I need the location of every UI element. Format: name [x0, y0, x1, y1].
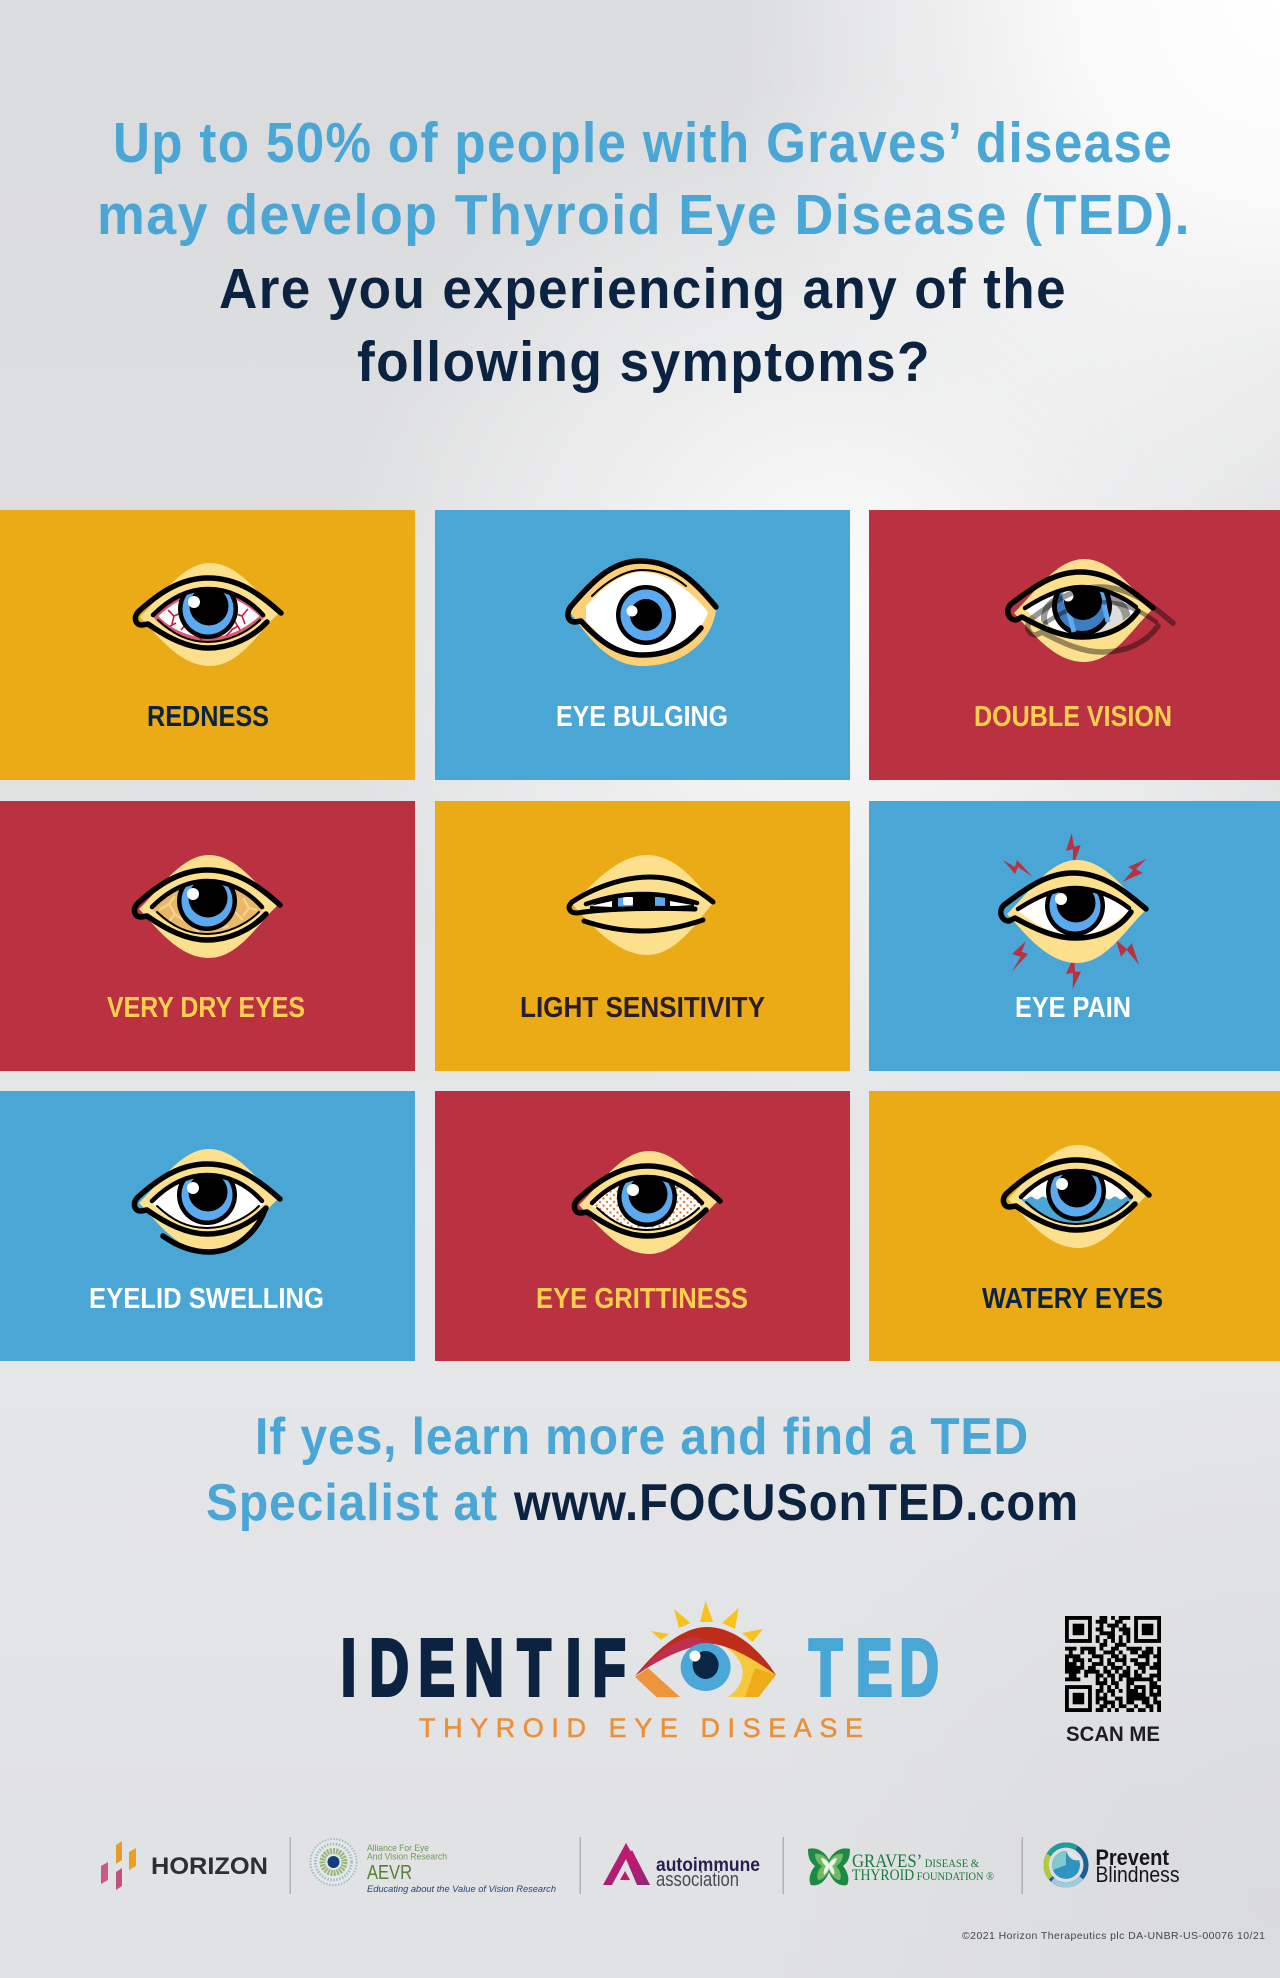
label: eyelid swelling: EYELID SWELLING — [89, 1283, 324, 1315]
logo: Prevent Blindness: Prevent — [1096, 1845, 1170, 1870]
panel: redness — [0, 510, 415, 780]
label: very dry eyes: VERY DRY EYES — [107, 992, 305, 1024]
icon: painful eye with lightning bolts — [1001, 833, 1147, 989]
icon: gritty eye — [574, 1151, 720, 1254]
title: Are you experiencing any of the — [219, 257, 1067, 321]
logo: AEVR: Alliance For Eye — [367, 1843, 429, 1854]
wordmark: TED: TED — [809, 1624, 939, 1713]
call to action text — [206, 1408, 1079, 1532]
label: eye pain: EYE PAIN — [1015, 992, 1131, 1024]
label: redness: REDNESS — [147, 701, 269, 733]
title: may develop Thyroid Eye Disease (TED). — [97, 183, 1191, 247]
logo: Graves' Disease and Thyroid Foundation — [808, 1848, 994, 1885]
logo: AEVR: AEVR — [367, 1862, 412, 1884]
title — [97, 111, 1191, 394]
QR code — [1065, 1618, 1161, 1746]
title: following symptoms? — [357, 330, 931, 394]
panel: light sensitivity — [435, 801, 850, 1071]
title: Up to 50% of people with Graves’ disease — [113, 111, 1173, 175]
tagline: THYROID EYE DISEASE — [419, 1713, 863, 1743]
logo: Prevent Blindness: Blindness — [1096, 1862, 1180, 1887]
icon: bulging eye — [568, 561, 716, 666]
panel: eyelid swelling — [0, 1091, 415, 1361]
panel: very dry eyes — [0, 801, 415, 1071]
logo: autoimmune association: autoimmune — [656, 1855, 760, 1876]
call to action text: If yes, learn more and find a TED — [255, 1408, 1029, 1466]
logo: Graves' Disease and Thyroid Foundation: GRAVES’ DISEASE & — [852, 1851, 980, 1872]
panel: eye bulging — [435, 510, 850, 780]
logo: Horizon: HORIZON — [151, 1853, 268, 1880]
logo: AEVR — [310, 1839, 556, 1895]
logo: Horizon — [101, 1841, 268, 1890]
label: eye bulging: EYE BULGING — [556, 701, 728, 733]
label: eye grittiness: EYE GRITTINESS — [536, 1283, 748, 1315]
panel: eye pain — [869, 801, 1280, 1071]
icon: watery eye — [1003, 1145, 1149, 1248]
call to action text: www.FOCUSonTED.com — [513, 1474, 1079, 1532]
logo: Graves' Disease and Thyroid Foundation: THYROID FOUNDATION ® — [852, 1867, 994, 1884]
logo: autoimmune association: association — [656, 1869, 739, 1891]
icon: squinting eye — [569, 855, 713, 955]
icon: double vision eye — [1008, 559, 1173, 662]
label: double vision: DOUBLE VISION — [974, 701, 1172, 733]
copyright: ©2021 Horizon Therapeutics plc DA-UNBR-US-00076 10/21 — [962, 1930, 1265, 1942]
logo: Prevent Blindness — [1038, 1837, 1180, 1893]
panel: double vision — [869, 510, 1280, 780]
icon: dry eye — [134, 855, 280, 958]
label: watery eyes: WATERY EYES — [982, 1283, 1163, 1315]
label: light sensitivity: LIGHT SENSITIVITY — [520, 992, 765, 1024]
logo: AEVR: Educating about the Value of Vision Research — [367, 1884, 556, 1895]
icon: swollen eyelid — [134, 1149, 280, 1252]
panel: eye grittiness — [435, 1091, 850, 1361]
logo: Identify TED — [341, 1601, 939, 1743]
logo: autoimmune association — [603, 1843, 760, 1891]
call to action text: Specialist at — [206, 1474, 498, 1532]
panel: watery eyes — [869, 1091, 1280, 1361]
label: scan me: SCAN ME — [1066, 1722, 1160, 1746]
logo: AEVR: And Vision Research — [367, 1852, 447, 1862]
partner logos — [101, 1837, 1180, 1895]
logo eye with sun rays — [635, 1601, 776, 1697]
wordmark: IDENTIF: IDENTIF — [341, 1624, 626, 1713]
icon: red eye — [135, 563, 281, 666]
